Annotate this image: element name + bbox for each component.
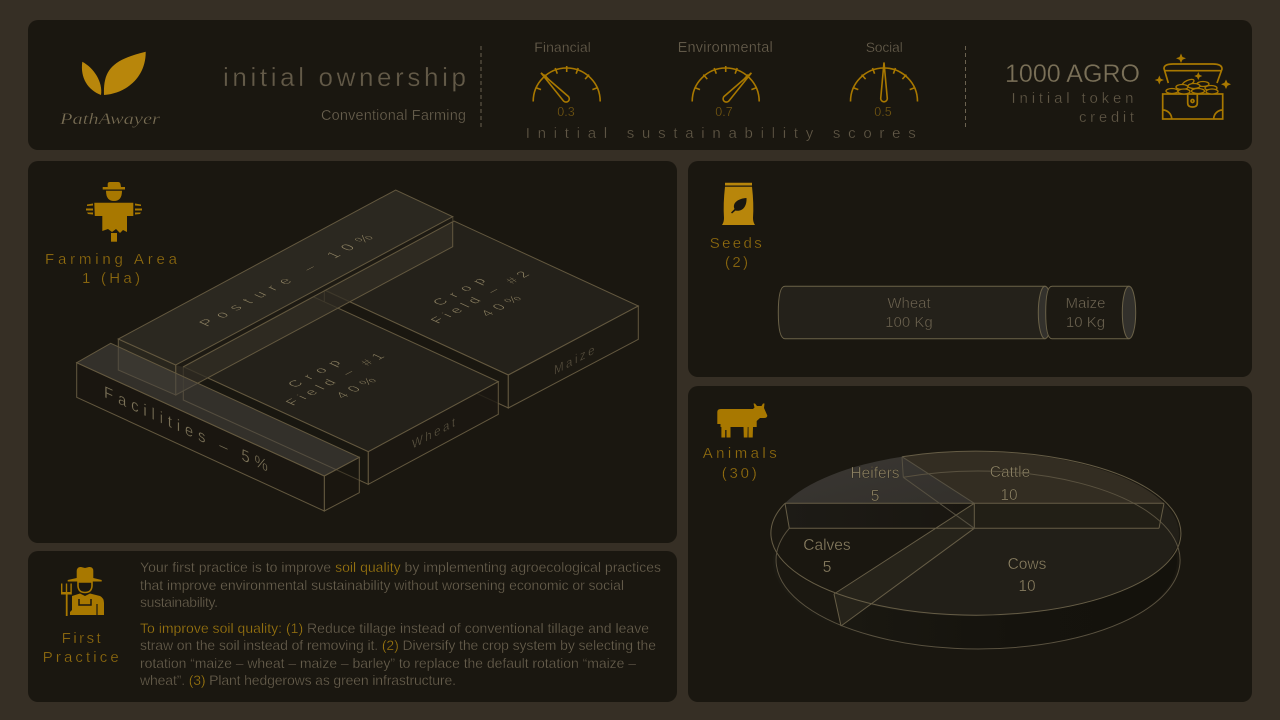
icon: seed bag: [722, 183, 755, 225]
text: how to improve: rotation “maize – wheat – maize – barley” to replace the default rotation “maize –: [140, 655, 636, 671]
label: crop field 2: 40%: [476, 293, 525, 318]
panel: seeds: [688, 161, 1252, 377]
text: intro: that improve environmental sustainability without worsening economic or social: [140, 577, 624, 593]
icon: treasure chest: [1155, 54, 1231, 119]
icon: farmer: [61, 567, 104, 616]
label: calves: Calves: [803, 537, 851, 554]
label: heifers: 5: [871, 488, 879, 505]
icon: scarecrow: [86, 182, 142, 242]
text: intro: [140, 559, 661, 610]
gauge: environmental: 0.7: [715, 105, 733, 119]
heading: seeds: [710, 235, 762, 271]
label: facilities: Facilities – 5%: [104, 383, 268, 476]
heading: animals: [703, 445, 777, 482]
heading: seeds: Seeds: [710, 235, 762, 252]
label: crop field 1: Crop: [283, 357, 345, 389]
gauge: environmental: [678, 40, 773, 119]
text: how to improve: straw on the soil instead of removing it. (2) Diversify the crop system by selecting the: [140, 637, 656, 653]
panel: farming area: [28, 161, 677, 543]
cylinder: maize: 10 Kg: [1066, 314, 1105, 331]
heading: farming area: [45, 251, 178, 287]
label: crop field 2: Crop: [428, 275, 490, 307]
token caption: Initial token: [1012, 90, 1134, 107]
gauge: social: [850, 39, 918, 119]
label: posture: Posture – 10%: [195, 232, 378, 329]
field: posture: [118, 190, 453, 395]
token amount: 1000 AGRO: [1005, 60, 1140, 88]
cylinder: maize: [1046, 286, 1136, 339]
label: crop field 2: Field – #2: [426, 269, 533, 325]
label: maize: Maize: [554, 341, 594, 378]
heading: animals: (30): [722, 465, 757, 482]
field: crop 1 (wheat): [183, 296, 498, 484]
label: cows: Cows: [1008, 556, 1047, 573]
text: how to improve: [139, 620, 656, 688]
label: wheat: Wheat: [412, 414, 455, 452]
gauge: financial: [533, 39, 600, 119]
heading: first practice: Practice: [43, 649, 119, 666]
block: facilities: [77, 343, 359, 511]
gauges caption: Initial sustainability scores: [526, 125, 916, 142]
label: calves: [803, 537, 851, 576]
label: crop field 1: 40%: [331, 375, 380, 400]
gauge: environmental: Environmental: [678, 40, 773, 56]
heading: first practice: First: [62, 630, 102, 647]
text: how to improve: wheat”. (3) Plant hedgerows as green infrastructure.: [139, 672, 456, 688]
heading: animals: Animals: [703, 445, 777, 462]
text: intro: sustainability.: [140, 594, 218, 610]
cylinder: wheat: Wheat: [887, 295, 932, 312]
text: intro: Your first practice is to improve soil quality by implementing agroecological practices: [140, 559, 661, 575]
label: heifers: [850, 465, 900, 505]
panel: header: [28, 20, 1252, 150]
label: heifers: Heifers: [850, 465, 900, 482]
label: cattle: Cattle: [990, 464, 1030, 481]
panel: animals: [688, 386, 1252, 702]
cylinder: wheat: [778, 286, 1052, 339]
cylinder: maize: Maize: [1065, 295, 1106, 312]
label: calves: 5: [823, 559, 831, 576]
token caption: [1012, 90, 1135, 126]
subtitle: Conventional Farming: [321, 108, 466, 124]
icon: PathAwayer logo leaves: [82, 52, 146, 95]
field: crop 2 (maize): [324, 221, 638, 408]
label: cattle: [990, 464, 1030, 504]
token caption: credit: [1079, 109, 1135, 126]
icon: cow: [717, 404, 767, 438]
label: crop field 1: Field – #1: [281, 351, 388, 407]
logo name: PathAwayer: [59, 111, 161, 128]
heading: first practice: [43, 630, 119, 666]
gauge: financial: 0.3: [557, 105, 575, 119]
heading: farming area: 1 (Ha): [82, 270, 140, 287]
gauge: social: Social: [866, 39, 903, 55]
heading: seeds: (2): [725, 254, 748, 271]
heading: farming area: Farming Area: [45, 251, 178, 268]
label: cattle: 10: [1000, 487, 1018, 504]
chart: 3D pie: [770, 451, 1181, 650]
panel: first practice: [28, 551, 677, 702]
cylinder: wheat: 100 Kg: [885, 314, 933, 331]
gauge: financial: Financial: [534, 39, 591, 55]
gauge: social: 0.5: [874, 105, 892, 119]
label: cows: 10: [1018, 578, 1036, 595]
title: initial ownership: [223, 62, 466, 92]
text: how to improve: To improve soil quality: (1) Reduce tillage instead of conventional tillage and leave: [140, 620, 649, 636]
label: cows: [1008, 556, 1047, 595]
